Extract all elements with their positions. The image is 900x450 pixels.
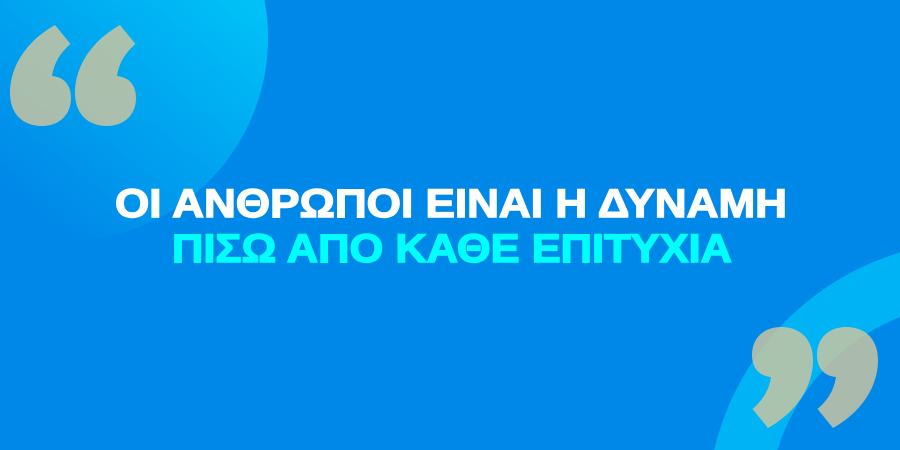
icon: closing quotation marks xyxy=(752,327,878,428)
decorative circle top left xyxy=(0,0,268,241)
heading line 1: ΟΙ ΑΝΘΡΩΠΟΙ ΕΙΝΑΙ Η ΔΥΝΑΜΗ xyxy=(115,182,787,226)
decorative ring bottom right xyxy=(714,252,900,450)
icon: opening quotation marks xyxy=(10,25,136,126)
heading line 2: ΠΙΣΩ ΑΠΟ ΚΑΘΕ ΕΠΙΤΥΧΙΑ xyxy=(172,227,732,271)
